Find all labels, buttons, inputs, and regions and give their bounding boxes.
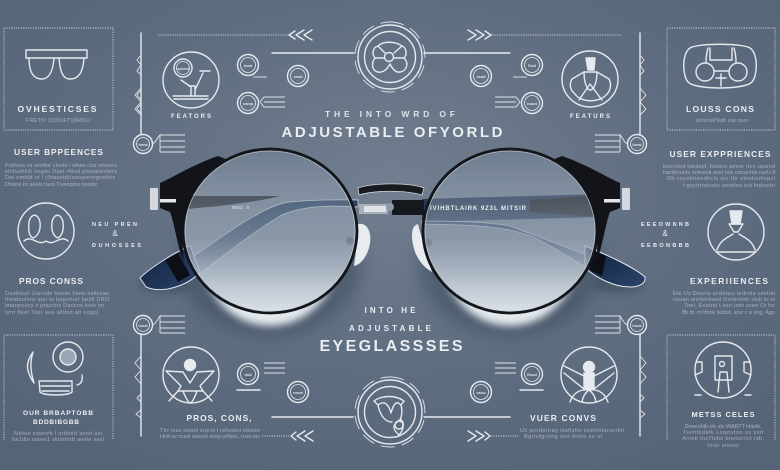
body: research: Metos sdsetrb I ortitstd snott ssl — [14, 431, 102, 437]
arrow: bottom dotted rule left — [262, 431, 313, 441]
icon: circular lens pair left — [18, 203, 74, 259]
text block: experiences: EXPERIIENCES — [690, 276, 768, 286]
badge: small lower left — [237, 364, 260, 390]
caption: louss cons: tolotosPlsdt sat ousr — [696, 118, 749, 124]
icon: figure with arms left — [163, 347, 219, 403]
subtitle: EYEGLASSSES — [320, 338, 463, 355]
text block: left pros cons: PROS CONSS — [19, 276, 83, 286]
text block: experiences: Ete Us Docnis prstkiwu brdrnta cnvtuit — [673, 291, 775, 297]
left temple arm — [140, 196, 358, 290]
badge: small lower right — [520, 364, 543, 390]
text: pros cons centre-left — [160, 428, 260, 440]
heading: research: OUR BRBAPTOBB — [23, 410, 93, 417]
icon: glasses — [26, 50, 87, 79]
text block: right user experiences: Dh vocsbneedhcls mo thr sbndsuhvpcl — [667, 176, 775, 182]
text block: experiences: ffb ttr, m tthok Iscbst, srur c o sng, Ago — [682, 310, 775, 316]
text block: left pros cons: lmanpoocx x pnuctns Daccns looe im — [5, 303, 104, 309]
icon: feature pedestal — [163, 52, 219, 108]
small badges lower centre: osso — [476, 390, 486, 395]
right lens — [423, 149, 597, 313]
text block: left user experiences: Dat ombld ot I clhaustdrlowspenngceties — [5, 175, 115, 181]
panel: bottom-right feature rail — [595, 316, 646, 436]
opaque lens base — [183, 149, 597, 313]
heading: metss celes: METSS CELES — [692, 410, 754, 419]
arrow: top dotted rule left — [158, 30, 312, 40]
small badges top-right: Dod — [528, 63, 536, 68]
text: vuer cons: Uli prntbntray lssflsho svsfentsrscrbll — [520, 428, 624, 434]
small badges lower centre: roset — [293, 390, 304, 395]
caption: overview: FRETIV (910UFTI)6MCU — [26, 118, 90, 124]
text block: experiences: cooan anntstntaed Dsstnvtstr stsb to st — [673, 297, 775, 303]
text block: right user experiences: t gsyrtrodoots seveles ina fsatsetn — [683, 183, 775, 189]
text block: right user experiences: lsocrrtod Ioeaspf, bavers amrer rtcn usarcd — [663, 164, 775, 170]
emblem: top centre — [272, 22, 510, 92]
label: left middle note: NEU PREN — [92, 222, 138, 228]
icon: figure with arms right — [561, 347, 617, 403]
arrow: bottom dotted rule right — [468, 431, 519, 441]
text block: left pros cons — [5, 276, 109, 316]
panel: top-left feature rail — [134, 33, 185, 154]
text: pros cons centre-left: Ttrr tsss slssst srprot l rsfuosot stlsntn — [160, 428, 260, 434]
icon: person portrait right — [708, 204, 764, 260]
panel: bottom-right metss celes: Vnte snsusi — [707, 443, 739, 449]
text block: experiences: Toel. Eostrst t sen totn ssen Oi for — [684, 303, 775, 309]
panel: top-right feature rail — [595, 33, 646, 154]
small badges upper centre: ssad — [476, 74, 486, 79]
text block: left pros cons: srrn fleet Toer aee wlttnd ab nogoj — [5, 310, 98, 316]
heading: louss cons: LOUSS CONS — [686, 104, 754, 114]
icon: lens and mask — [28, 342, 83, 395]
text block: left pros cons: Dasthsuh Uarrsde hande honn oslinsae — [5, 291, 109, 297]
icon: lens case — [684, 44, 756, 88]
text block: right user experiences — [663, 149, 775, 189]
text block: left user experiences — [5, 147, 117, 188]
text block: right user experiences: USER EXPPRIENCES — [670, 149, 771, 159]
badge: small lower right: Essd — [527, 372, 537, 377]
label: feators: FEATORS — [171, 114, 211, 120]
right frame wing and hinge — [552, 156, 630, 262]
icon: person with shoulders — [562, 51, 618, 107]
label: left middle note: & — [112, 229, 118, 238]
subtitle: INTO HE — [364, 306, 416, 315]
badge: small lower left: osd — [244, 372, 252, 377]
panel: bottom-left feature rail: lonal — [138, 323, 148, 328]
label: right middle note: EEBONBBB — [641, 243, 690, 249]
label: right middle note — [641, 222, 690, 249]
label: featurs: FEATURS — [570, 114, 610, 120]
small badges top-right: hood — [527, 101, 537, 106]
left lens — [183, 149, 357, 313]
text block: left user experiences: USER BPPEENCES — [14, 147, 103, 157]
text: vuer cons: Bgrndgrslrg sns ttvtts ss st — [524, 434, 602, 440]
label: right middle note: & — [662, 229, 668, 238]
heading: overview: OVHESTICSES — [18, 104, 97, 114]
title: ADJUSTABLE OFYORLD — [282, 124, 503, 141]
body: metss celes: Doweshtb olo sto WARTT hfanlk. — [684, 424, 762, 430]
arrow: top dotted rule right — [468, 30, 622, 40]
nose pads — [346, 224, 432, 272]
text block: right user experiences: hactbnunts nofeeek aser twc oocannts carU tl — [663, 170, 775, 176]
panel: bottom-left feature rail — [134, 316, 185, 436]
small badges upper centre — [260, 66, 520, 107]
panel: top-right feature rail: lonal — [632, 142, 642, 147]
panel: bottom-right metss celes: Tsettlhdatk Lswnvton os ssd — [683, 430, 763, 436]
small badges upper centre: ssad — [293, 74, 303, 79]
title — [282, 109, 503, 141]
small badges top-left: swop — [243, 101, 254, 106]
subtitle: ADJUSTABLE — [349, 324, 432, 333]
text block: left pros cons: thmdoollow ano ts beponurt faulll DRD — [5, 297, 109, 303]
small badges top-right — [513, 54, 542, 114]
right temple arm — [422, 194, 645, 287]
small badges top-left — [238, 54, 267, 114]
icon: figure on card — [695, 342, 751, 398]
text block: left user experiences: Pothera ca sentlor clavte i whae ctor vrseers — [5, 163, 117, 169]
small badges top-left: toad — [244, 63, 253, 68]
text: pros cons centre-left: Hrst sv ccsst nasvot wsrp srtfsoc, rnso tsc — [160, 434, 260, 440]
bridge — [358, 184, 424, 215]
panel: top-right lens case — [667, 28, 775, 130]
panel: bottom-right metss celes: Arveb tnsTtsbo bnvtscrict rsb. — [682, 436, 764, 442]
subheading: research: BDDBIBGBB — [33, 419, 79, 426]
text block: experiences — [673, 276, 775, 316]
temple engraving right: IVIHBTLAIRK 9Z3L MITSIR — [430, 206, 527, 212]
text block: left user experiences: Dhane bt aeels taes Tiveopins noode — [5, 182, 97, 188]
panel: top-left overview — [4, 28, 113, 130]
small badges lower centre — [264, 363, 516, 402]
title: THE INTO WRD OF — [325, 109, 455, 119]
text: vuer cons — [520, 428, 624, 440]
panel: bottom-right metss celes — [667, 335, 775, 449]
lens shadow and halo — [139, 182, 644, 336]
label: vuer cons: VUER CONVS — [530, 413, 596, 423]
temple engraving left: M5D, 9 — [232, 205, 249, 210]
glasses — [139, 149, 645, 336]
panel: bottom-left research: ba1dlo saber1 skbtntrdt aeele ssul — [12, 437, 104, 443]
emblem: bottom centre — [272, 377, 510, 447]
panel: top-left feature rail: lonal — [138, 142, 148, 147]
text block: left user experiences: sfchathlck tingso Dast rfdod poseptesters — [5, 169, 117, 175]
label: left middle note — [92, 222, 142, 249]
subtitle — [320, 306, 463, 355]
icon: feature pedestal: spend — [177, 66, 189, 71]
label: pros cons centre-left: PROS, CONS, — [186, 413, 252, 423]
label: right middle note: EEEOWNNB — [641, 222, 690, 228]
panel: bottom-right feature rail: lonal — [632, 323, 642, 328]
panel: bottom-left research — [4, 335, 113, 443]
left frame wing and hinge — [150, 156, 228, 262]
label: left middle note: DUHOSSES — [92, 243, 142, 249]
